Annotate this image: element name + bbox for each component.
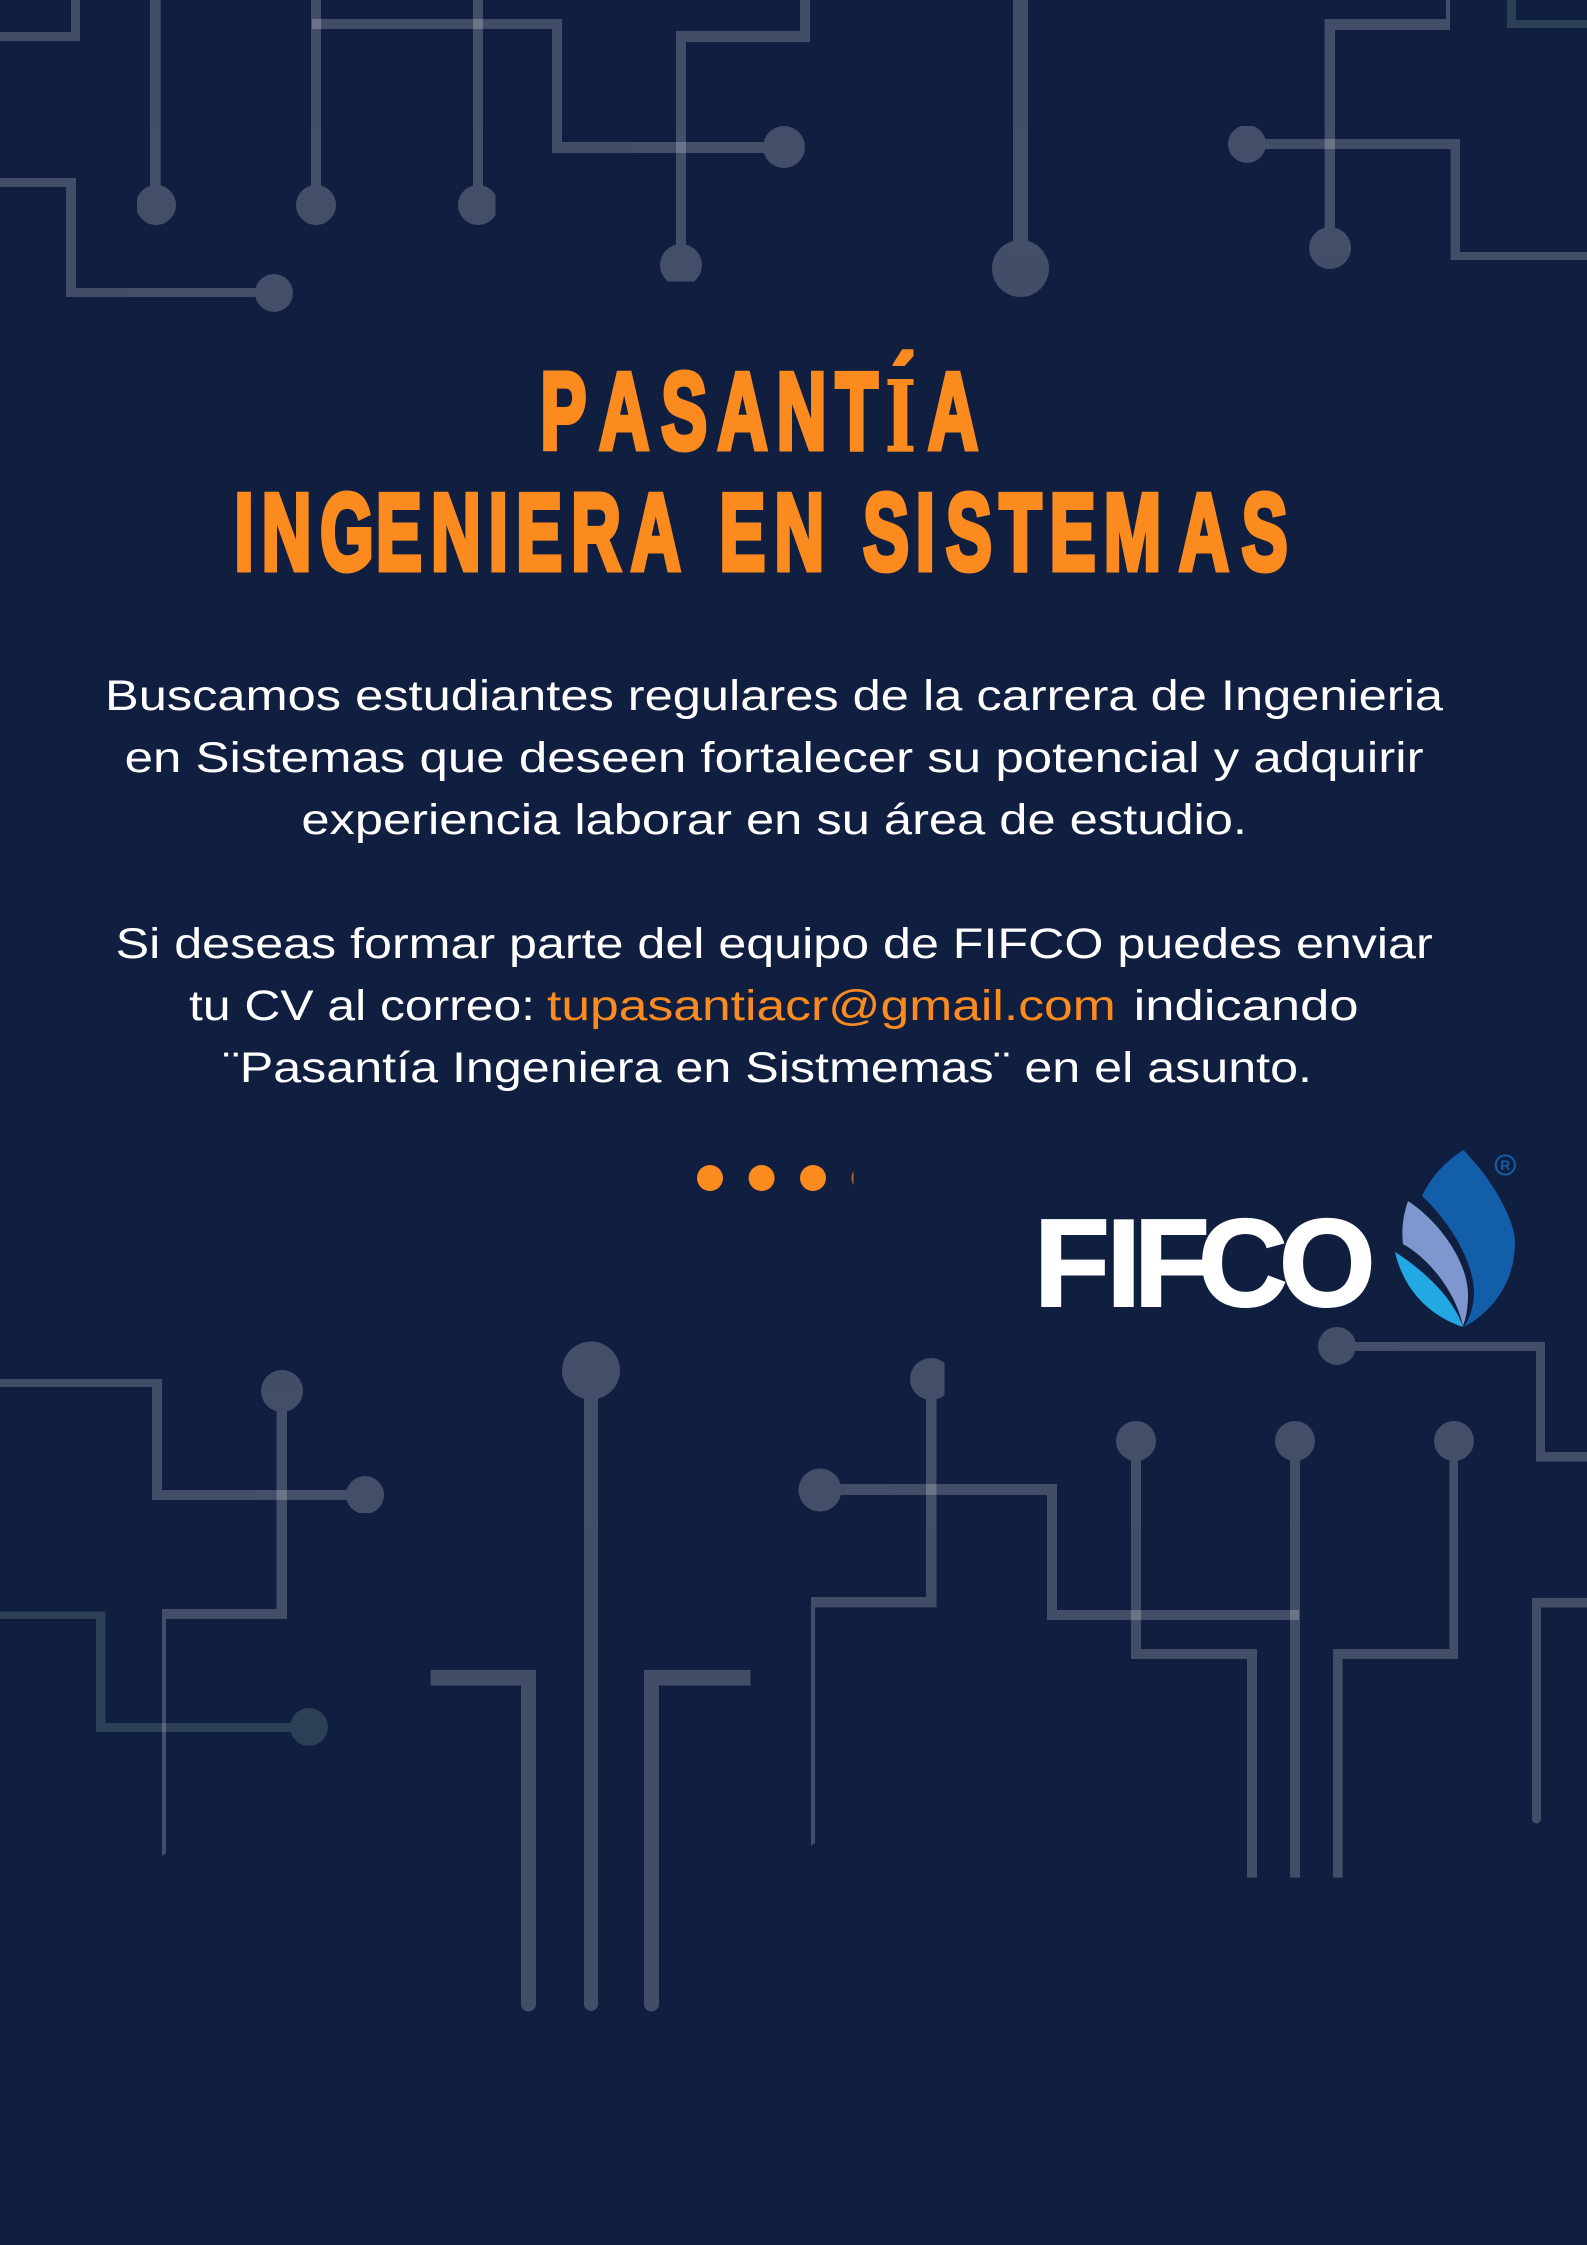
text block: intro paragraph [105, 672, 1443, 844]
text block: contact paragraph: tu CV al correo: [189, 982, 535, 1030]
text block: contact paragraph: tupasantiacr@gmail.com [547, 982, 1116, 1030]
text block: contact paragraph: Si deseas formar parte del equipo de FIFCO puedes enviar [116, 920, 1433, 968]
dots [697, 1165, 854, 1191]
circuit pattern: bottom [0, 1327, 1587, 2012]
text block: intro paragraph: experiencia laborar en su área de estudio. [301, 796, 1247, 844]
circuit pattern: top [0, 0, 1587, 312]
logo leaf: R [1500, 1157, 1510, 1173]
text block: contact paragraph [116, 920, 1433, 1092]
text block: contact paragraph: ¨Pasantía Ingeniera en Sistmemas¨ en el asunto. [223, 1044, 1312, 1092]
title [234, 352, 1288, 594]
text block: intro paragraph: en Sistemas que deseen fortalecer su potencial y adquirir [125, 734, 1424, 782]
title: INGENIERA EN SISTEMAS [234, 473, 1288, 594]
logo wordmark: FIFCO [1034, 1195, 1375, 1333]
text block: intro paragraph: Buscamos estudiantes regulares de la carrera de Ingenieria [105, 672, 1443, 720]
logo: FIFCO [1034, 1150, 1515, 1333]
text block: contact paragraph: indicando [1134, 982, 1359, 1030]
logo leaf [1395, 1150, 1515, 1327]
title: PASANTÍA [540, 352, 978, 473]
